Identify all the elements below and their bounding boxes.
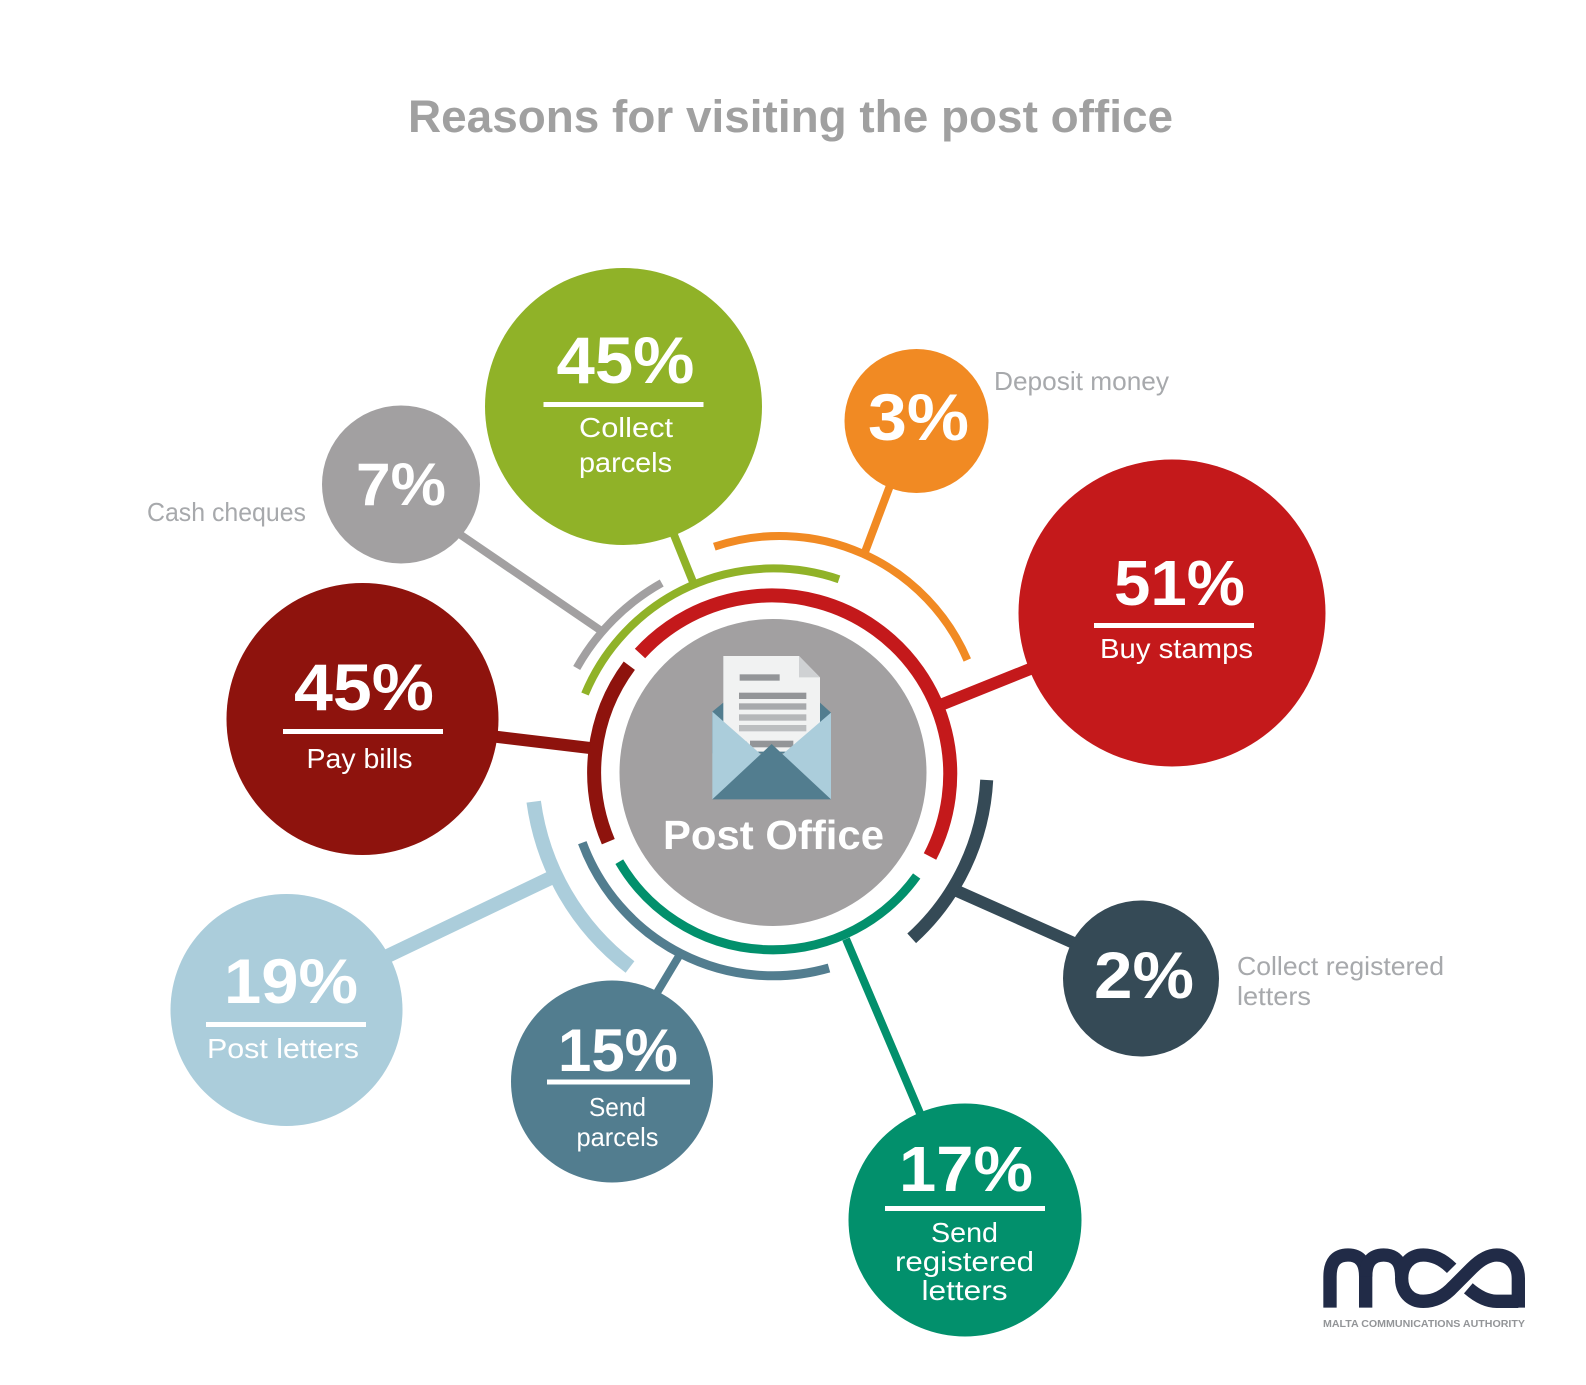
arc and connector: post letters xyxy=(375,802,630,967)
arc and connector: collect registered letters xyxy=(912,780,1085,948)
bubble: send registered letters 17%: 17% xyxy=(899,1133,1033,1205)
bubble: cash cheques 7%: 7% xyxy=(356,451,446,518)
arc and connector: collect parcels xyxy=(585,525,839,694)
panel: central hub xyxy=(620,619,926,926)
bubble: post letters 19% xyxy=(170,894,402,1126)
icon: open envelope with letter xyxy=(712,656,831,799)
arc and connector: buy stamps xyxy=(640,595,1045,856)
hub label: Post Office xyxy=(663,812,884,858)
bubble: post letters 19%: 19% xyxy=(224,947,358,1017)
logo: MCA Malta Communications Authority xyxy=(1323,1255,1525,1330)
bubble: send registered letters 17%: Send xyxy=(931,1217,998,1248)
bubble: buy stamps 51%: Buy stamps xyxy=(1100,633,1253,664)
bubble: cash cheques 7% xyxy=(322,406,480,564)
arc and connector: deposit money xyxy=(714,475,967,660)
bubble: pay bills 45%: 45% xyxy=(294,650,434,724)
bubble: collect parcels 45%: 45% xyxy=(556,323,694,397)
bubble: collect parcels 45%: Collect xyxy=(579,412,673,443)
bubble: send registered letters 17%: letters xyxy=(922,1275,1008,1306)
bubble: deposit money 3% xyxy=(844,349,988,493)
arc and connector: cash cheques xyxy=(455,531,662,668)
bubble: send registered letters 17%: registered xyxy=(895,1246,1034,1277)
bubble: send parcels 15%: parcels xyxy=(576,1122,658,1152)
label: cash cheques: Cash cheques xyxy=(147,497,306,527)
bubble: collect registered letters 2% xyxy=(1063,900,1219,1056)
bubble: send parcels 15%: Send xyxy=(589,1092,646,1122)
label: deposit money: Deposit money xyxy=(994,366,1169,396)
arc and connector: send parcels xyxy=(582,843,829,1001)
bubble: collect parcels 45%: parcels xyxy=(579,447,672,478)
bubble: send parcels 15% xyxy=(511,980,713,1182)
logo: MCA Malta Communications Authority: MALTA COMMUNICATIONS AUTHORITY xyxy=(1323,1319,1525,1330)
hub circle xyxy=(620,619,926,926)
label: collect registered letters: Collect registered xyxy=(1237,951,1444,981)
bubble: send registered letters 17% xyxy=(848,1104,1082,1336)
bubble: post letters 19%: Post letters xyxy=(207,1033,359,1064)
bubble: collect parcels 45% xyxy=(485,268,762,545)
bubble: deposit money 3%: 3% xyxy=(868,380,969,454)
bubble: pay bills 45% xyxy=(226,583,498,855)
bubble: buy stamps 51%: 51% xyxy=(1114,547,1245,619)
title: Reasons for visiting the post office xyxy=(408,91,1173,142)
bubble: buy stamps 51% xyxy=(1018,460,1326,766)
label: collect registered letters: letters xyxy=(1237,981,1311,1011)
arc and connector: pay bills xyxy=(490,666,629,842)
bubble: pay bills 45%: Pay bills xyxy=(306,743,412,774)
bubble: send parcels 15%: 15% xyxy=(558,1017,678,1084)
arc and connector: send registered letters xyxy=(619,862,925,1125)
bubble: collect registered letters 2%: 2% xyxy=(1094,938,1194,1012)
label: collect registered letters xyxy=(1237,951,1444,1011)
